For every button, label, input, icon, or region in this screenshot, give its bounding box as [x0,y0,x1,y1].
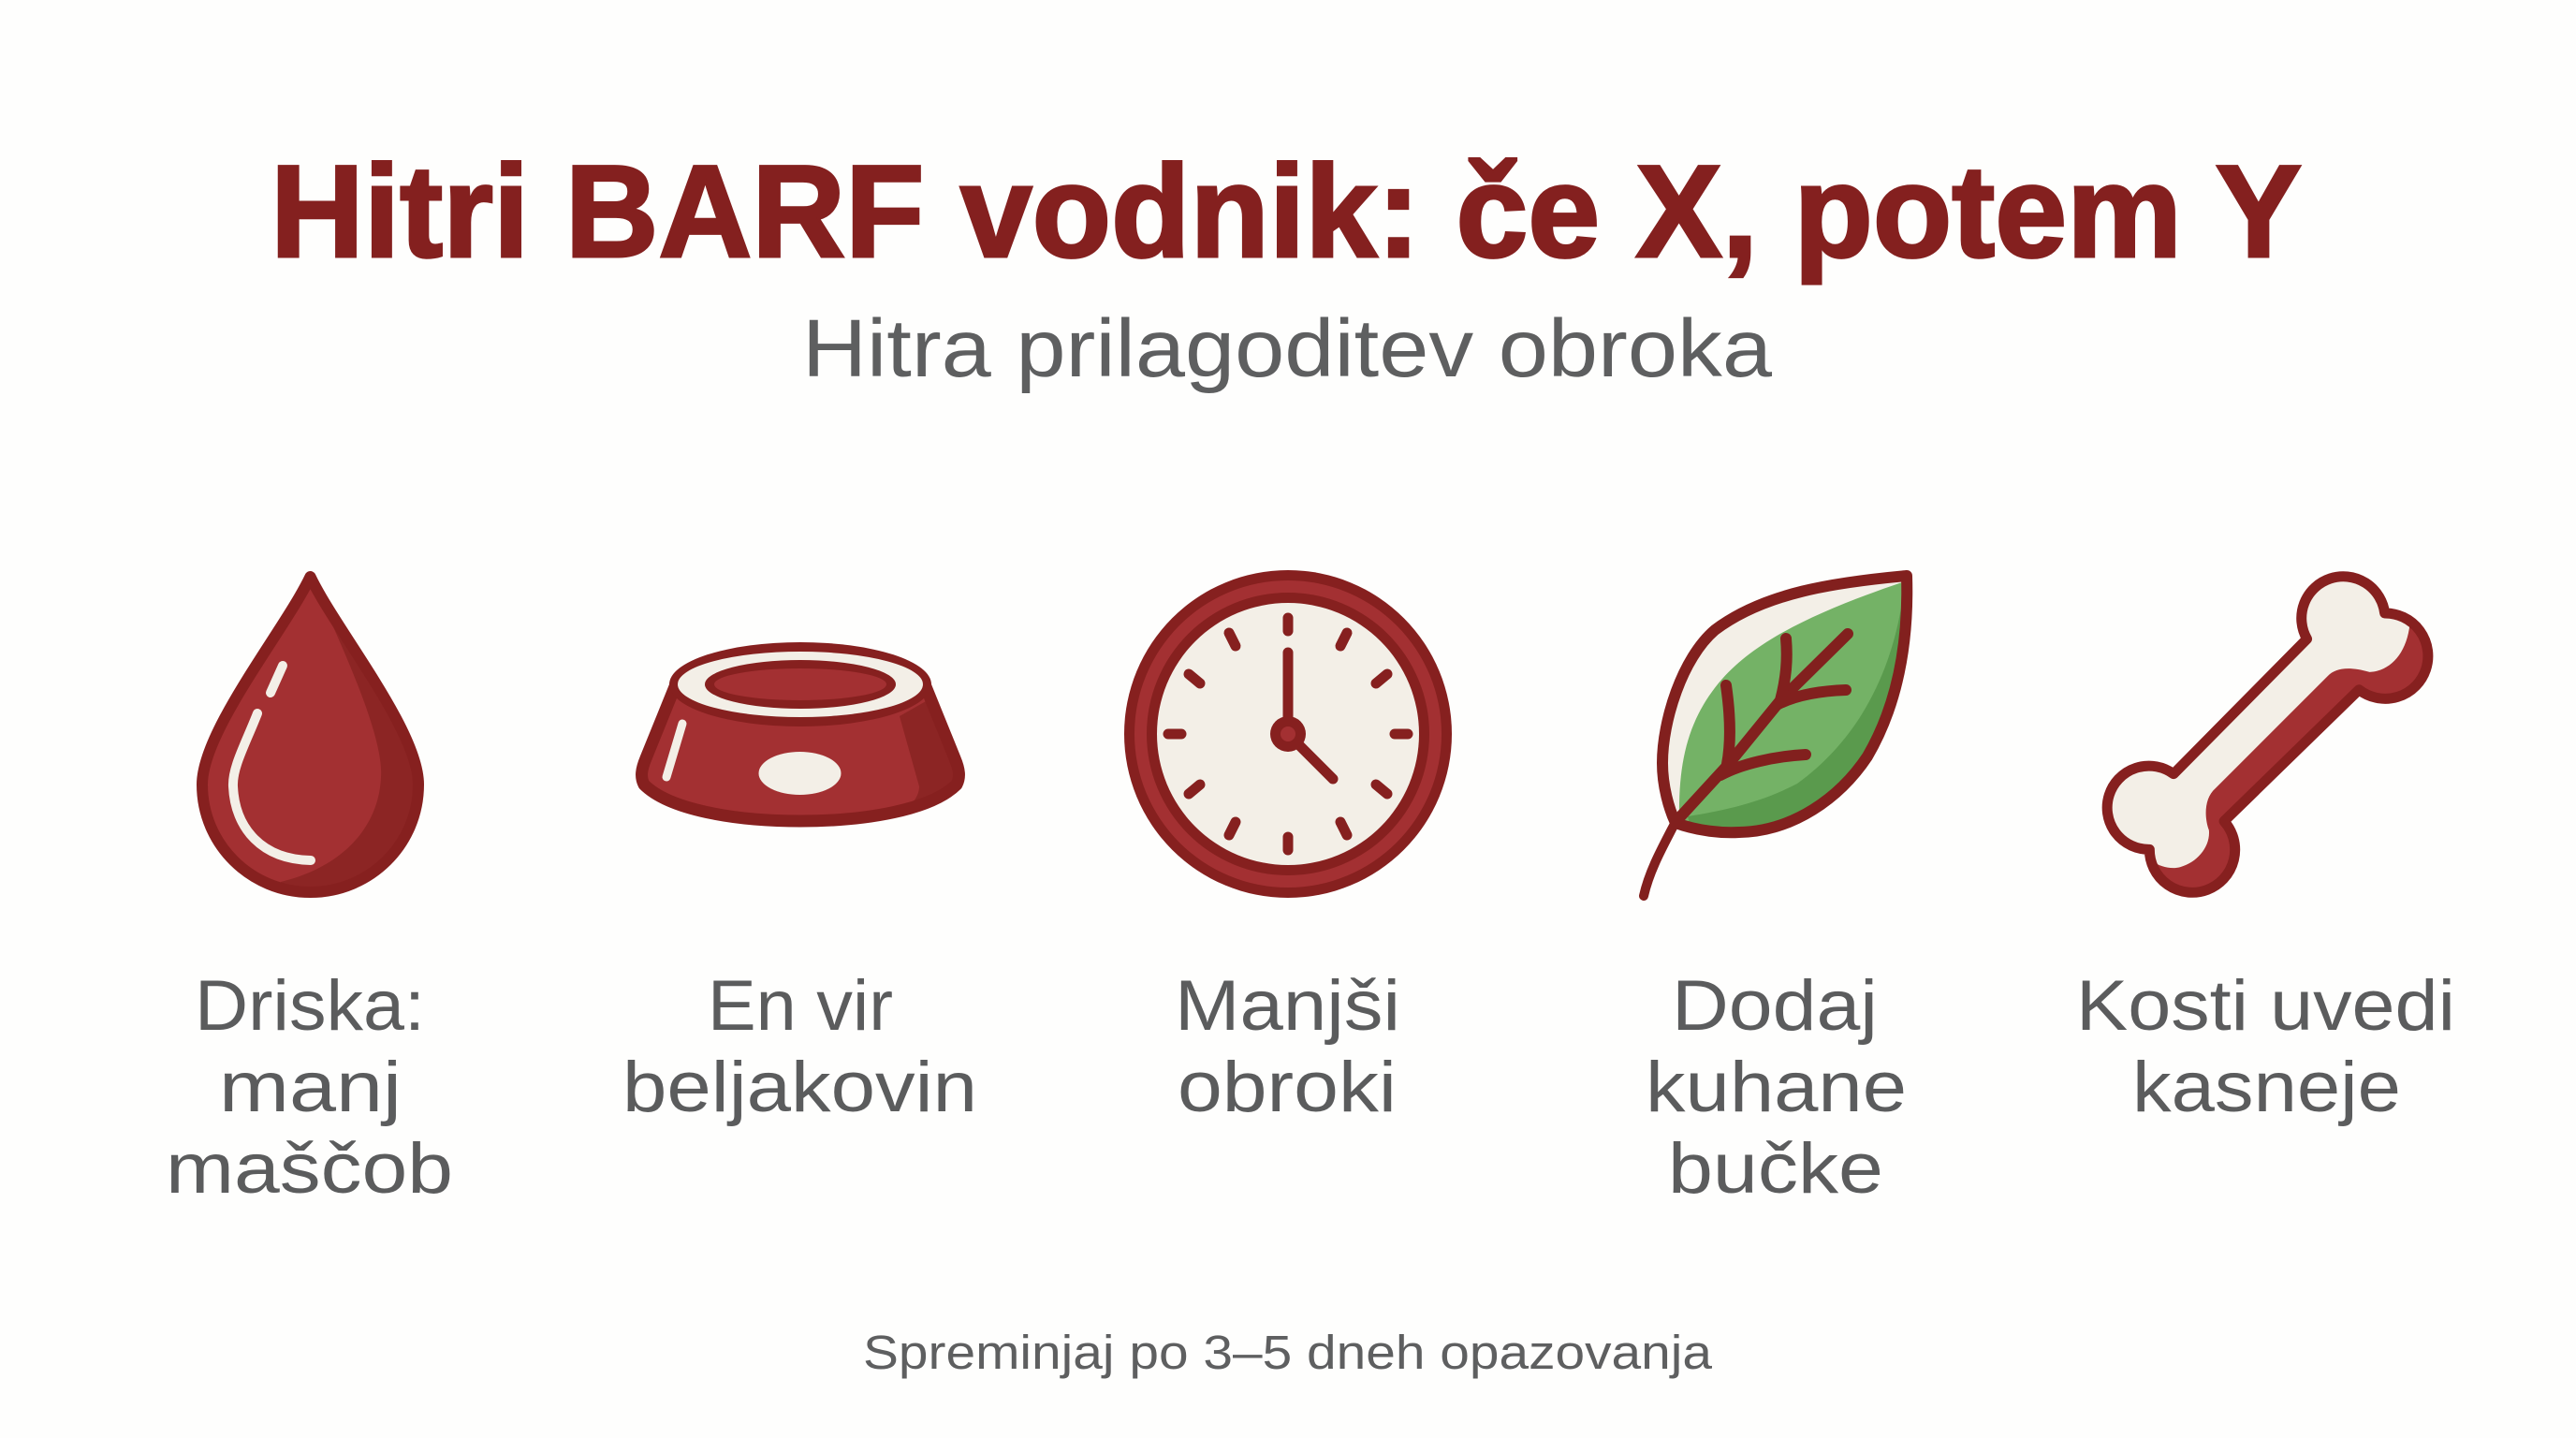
icon: food bowl [642,642,973,843]
icon: clock [1124,570,1452,898]
label: driska: manj [219,1048,402,1127]
label: driska [166,966,453,1209]
label: kosti uvedi kasneje: Kosti uvedi [2076,966,2455,1046]
label: en vir beljakovin: En vir [708,966,893,1046]
label: kosti uvedi kasneje [2076,966,2455,1127]
item: manjsi obroki [1124,570,1452,1127]
item: driska [170,571,449,1194]
icon: blood drop [197,571,424,898]
subtitle: Hitra prilagoditev obroka [802,303,1773,394]
icon: leaf [1644,576,1919,896]
label: manjsi obroki: Manjši [1175,966,1400,1046]
label: driska: maščob [166,1129,453,1209]
item: dodaj kuhane bucke [1644,576,1919,1209]
label: dodaj kuhane bucke: Dodaj [1672,966,1878,1046]
title: Hitri BARF vodnik: če X, potem Y [271,138,2302,285]
label: driska: Driska: [195,966,425,1046]
label: dodaj kuhane bucke: kuhane [1646,1048,1907,1127]
item: kosti uvedi kasneje [2082,571,2451,1126]
label: manjsi obroki: obroki [1178,1048,1397,1127]
item: en vir [622,642,977,1127]
label: dodaj kuhane bucke [1646,966,1907,1209]
label: manjsi obroki [1175,966,1400,1127]
footer note: Spreminjaj po 3–5 dneh opazovanja [863,1326,1713,1379]
icon: bone [2102,571,2434,898]
label: en vir beljakovin: beljakovin [622,1048,977,1127]
label: dodaj kuhane bucke: bučke [1668,1129,1883,1209]
label: kosti uvedi kasneje: kasneje [2132,1048,2401,1127]
label: en vir beljakovin [622,966,977,1127]
